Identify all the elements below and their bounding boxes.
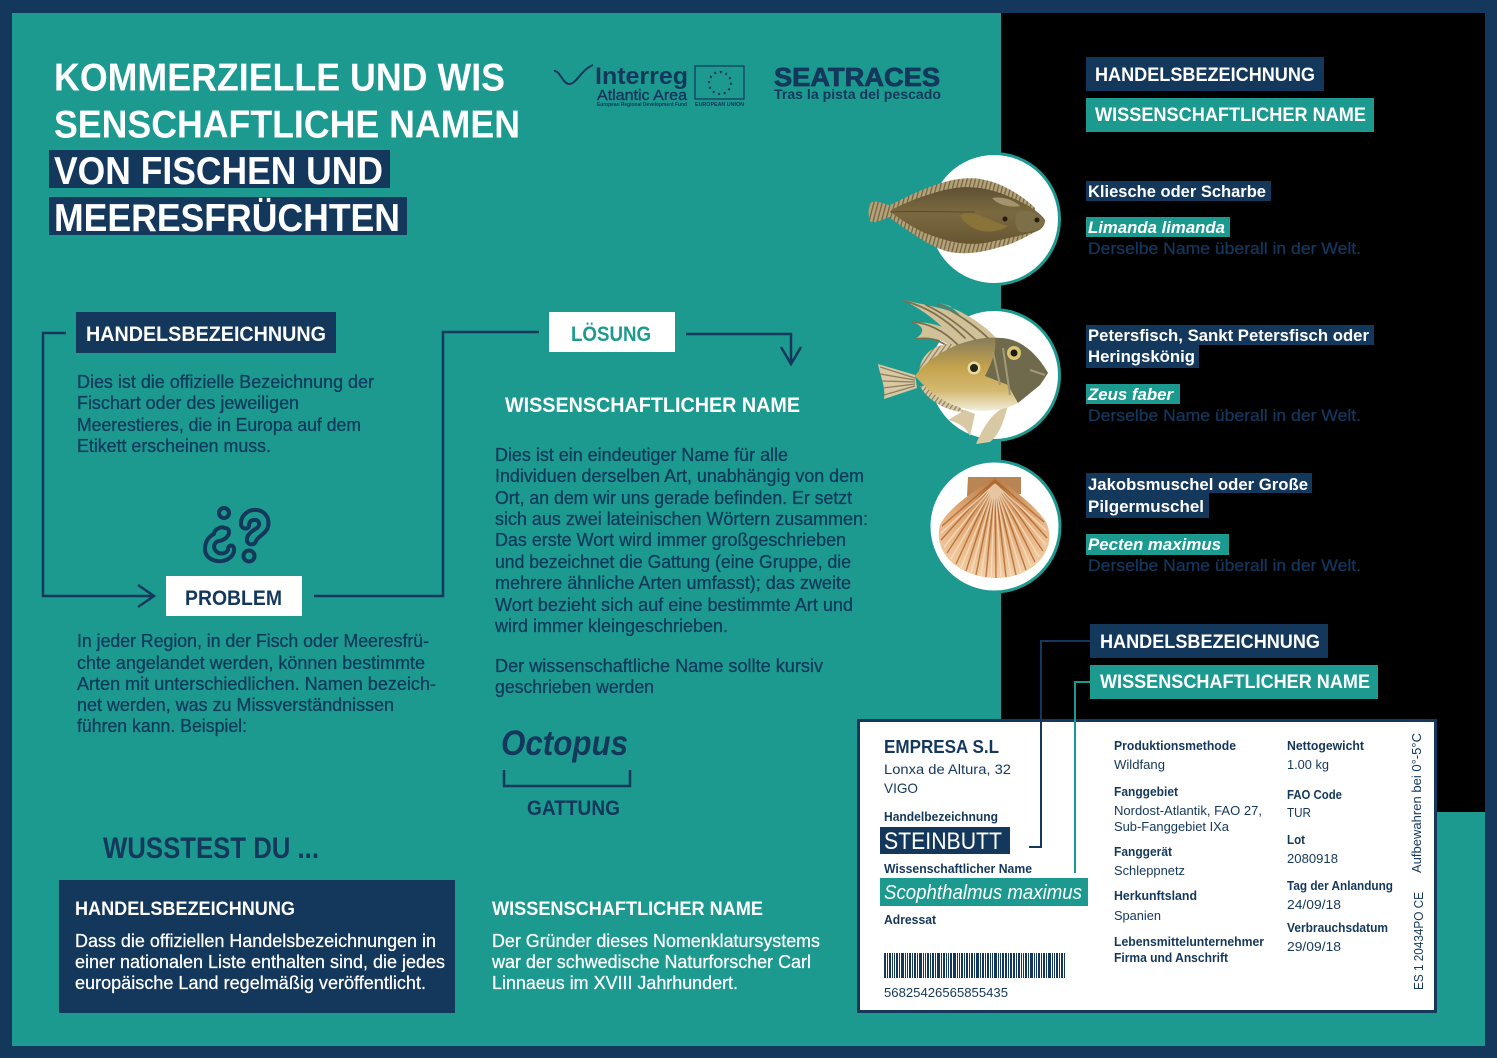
panel: Handelsbezeichnung definition: HANDELSBEZEICHNUNG [86,323,326,346]
example: Octopus genus: Octopus [501,724,628,763]
panel: Handelsbezeichnung definition: Fischart oder des jeweiligen [77,393,299,413]
text: Wissenschaftlicher Name description: geschrieben werden [495,677,654,697]
title: KOMMERZIELLE UND WIS [54,56,505,100]
label: product details column: Herkunftsland [1114,889,1197,903]
text: Jakobsmuschel: Pecten maximus [1088,535,1221,554]
text: Problem description: In jeder Region, in der Fisch oder Meeresfrü- [77,631,429,651]
text: Wissenschaftlicher Name description: Ort, an dem wir uns gerade befinden. Er setzt [495,488,852,508]
label: approval code: ES 1 20434PO CE [1412,892,1426,990]
arrow: Lösung to scientific name [686,334,801,364]
text: Wissenschaftlicher Name description: Individuen derselben Art, unabhängig von dem [495,466,864,486]
text: Wissenschaftlicher Name description: sich aus zwei lateinischen Wörtern zusammen: [495,509,868,529]
label: weight and dates column: Tag der Anlandung [1287,879,1393,893]
label: company: VIGO [884,780,918,796]
title [49,56,520,240]
text: Problem description: führen kann. Beispiel: [77,716,247,736]
text: Wissenschaftlicher Name description: Dies ist ein eindeutiger Name für alle [495,445,788,465]
text: Kliesche: Derselbe Name überall in der Welt. [1088,239,1361,258]
connector: trade name [1029,641,1090,847]
label: storage note: Aufbewahren bei 0°-5°C [1410,733,1424,873]
text: Kliesche: Kliesche oder Scharbe [1088,182,1266,201]
text: Problem description: Arten mit unterschiedlichen. Namen bezeich- [77,674,436,694]
background: black panel [1001,13,1485,812]
text: Petersfisch [1086,325,1374,425]
example: Octopus genus [501,724,630,820]
legend: label tags: HANDELSBEZEICHNUNG [1100,632,1320,653]
title: SENSCHAFTLICHE NAMEN [54,104,520,146]
legend: top right: WISSENSCHAFTLICHER NAME [1095,105,1366,126]
circle: scallop [929,461,1060,592]
label: addressee: Adressat [884,913,937,927]
panel: did you know, Wissenschaftlicher Name: Linnaeus im XVIII Jahrhundert. [492,973,738,993]
label: product details column: Wildfang [1114,758,1165,772]
text: Problem description: net werden, was zu Missverständnissen [77,695,394,715]
text: Problem description: chte angelandet werden, können bestimmte [77,653,425,673]
logo: Seatraces: Tras la pista del pescado [774,86,941,102]
label: trade name: STEINBUTT [884,828,1002,855]
logo: Interreg Atlantic Area: Atlantic Area [597,87,688,104]
text: Problem description [77,631,436,736]
label: trade name: Handelbezeichnung [884,810,998,824]
legend: label tags: WISSENSCHAFTLICHER NAME [1100,672,1370,693]
label: scientific name: Scophthalmus maximus [884,882,1082,904]
text: Jakobsmuschel: Pilgermuschel [1088,497,1204,516]
text: Petersfisch: Derselbe Name überall in der Welt. [1088,406,1361,425]
label: weight and dates column: Verbrauchsdatum [1287,921,1388,935]
text: Petersfisch: Petersfisch, Sankt Petersfisch oder [1088,326,1369,345]
title: MEERESFRÜCHTEN [54,197,400,240]
legend: label tags [1090,624,1378,699]
heading: Wissenschaftlicher Name: WISSENSCHAFTLICHER NAME [505,394,800,417]
panel: did you know, Wissenschaftlicher Name: Der Gründer dieses Nomenklatursystems [492,931,820,951]
panel: did you know, Handelsbezeichnung: europäische Land regelmäßig veröffentlicht. [75,973,426,993]
label: company: Lonxa de Altura, 32 [884,761,1011,777]
panel: did you know, Handelsbezeichnung: Dass die offiziellen Handelsbezeichnungen in [75,931,436,951]
label: product details column: Fanggebiet [1114,785,1179,799]
panel: Handelsbezeichnung definition: Dies ist die offizielle Bezeichnung der [77,372,374,392]
legend: top right: HANDELSBEZEICHNUNG [1095,65,1315,86]
label: product details column: Firma und Anschrift [1114,951,1229,965]
text: Petersfisch: Heringskönig [1088,347,1195,366]
label: weight and dates column [1287,739,1393,954]
text: Wissenschaftlicher Name description: wird immer kleingeschrieben. [494,616,728,636]
logo: Interreg Atlantic Area: European Regional Development Fund [597,102,687,108]
label: product details column [1114,739,1264,965]
panel: Handelsbezeichnung definition: Etikett erscheinen muss. [77,436,271,456]
logo: Interreg Atlantic Area [554,63,744,108]
text: Wissenschaftlicher Name description: Das erste Wort wird immer großgeschrieben [495,530,846,550]
label: trade name [880,810,1010,855]
label: Problem [166,576,302,616]
text: Jakobsmuschel: Jakobsmuschel oder Große [1088,475,1308,494]
label: weight and dates column: 1.00 kg [1287,758,1329,772]
panel: Handelsbezeichnung definition: Meerestieres, die in Europa auf dem [77,415,361,435]
example: Octopus genus: GATTUNG [527,797,620,820]
panel: Handelsbezeichnung definition [76,312,374,456]
text: Wissenschaftlicher Name description: Wort bezieht sich auf eine bestimmte Art und [495,595,853,615]
label: weight and dates column: FAO Code [1287,788,1342,802]
label: product details column: Nordost-Atlantik, FAO 27, [1114,804,1262,818]
label: product details column: Fanggerät [1114,845,1173,859]
panel: did you know, Wissenschaftlicher Name: war der schwedische Naturforscher Carl [491,952,811,972]
label: product details column: Produktionsmethode [1114,739,1236,753]
panel: did you know, Wissenschaftlicher Name: WISSENSCHAFTLICHER NAME [492,899,763,920]
circle: flounder [868,154,1060,284]
label: product details column: Lebensmittelunternehmer [1114,935,1264,949]
text: Wissenschaftlicher Name description: Der wissenschaftliche Name sollte kursiv [495,656,823,676]
logo: Interreg Atlantic Area: Interreg [595,63,688,90]
label: product details column: Spanien [1114,909,1161,923]
text: Jakobsmuschel: Derselbe Name überall in der Welt. [1088,556,1361,575]
text: Wissenschaftlicher Name description: mehrere ähnliche Arten umfasst); das zweite [495,573,851,593]
text: Kliesche [1086,181,1361,258]
label: barcode: 56825426565855435 [884,986,1008,1000]
icon: question marks [205,508,268,562]
panel: did you know, Handelsbezeichnung: HANDELSBEZEICHNUNG [75,899,295,920]
legend: top right [1086,57,1374,132]
heading: Wusstest du: WUSSTEST DU ... [103,832,319,865]
panel: product label [858,720,1436,1012]
label: product details column: Schleppnetz [1114,864,1185,878]
title: VON FISCHEN UND [54,150,383,193]
connector: scientific name [1075,682,1090,873]
arrow: Handelsbezeichnung to Problem [43,333,154,607]
label: company [884,737,1011,796]
label: scientific name: Wissenschaftlicher Name [884,862,1032,876]
label: Problem: PROBLEM [185,587,282,610]
text: Petersfisch: Zeus faber [1087,385,1174,404]
label: scientific name [880,862,1088,906]
arrow: Problem to Lösung [314,332,539,596]
text: Wissenschaftlicher Name description [494,445,868,697]
label: Lösung [549,312,675,352]
label: weight and dates column: 2080918 [1287,852,1338,866]
panel: did you know, Handelsbezeichnung: einer nationalen Liste enthalten sind, die jedes [75,952,445,972]
label: weight and dates column: Lot [1287,833,1306,847]
label: company: EMPRESA S.L [884,737,999,757]
label: Lösung: LÖSUNG [571,323,651,346]
logo: Interreg Atlantic Area: EUROPEAN UNION [695,102,744,108]
panel: did you know, Handelsbezeichnung [59,880,455,1013]
text: Jakobsmuschel [1086,473,1361,575]
label: weight and dates column: 24/09/18 [1287,898,1341,912]
text: Wissenschaftlicher Name description: und bezeichnet die Gattung (eine Gruppe, die [495,552,851,572]
text: Kliesche: Limanda limanda [1088,218,1225,237]
label: weight and dates column: 29/09/18 [1287,940,1341,954]
panel: did you know, Wissenschaftlicher Name [491,899,820,993]
logo: Seatraces: SEATRACES [774,62,940,92]
label: product details column: Sub-Fanggebiet IXa [1114,820,1229,834]
circle: John Dory [878,300,1060,444]
label: weight and dates column: Nettogewicht [1287,739,1365,753]
label: weight and dates column: TUR [1287,806,1311,820]
